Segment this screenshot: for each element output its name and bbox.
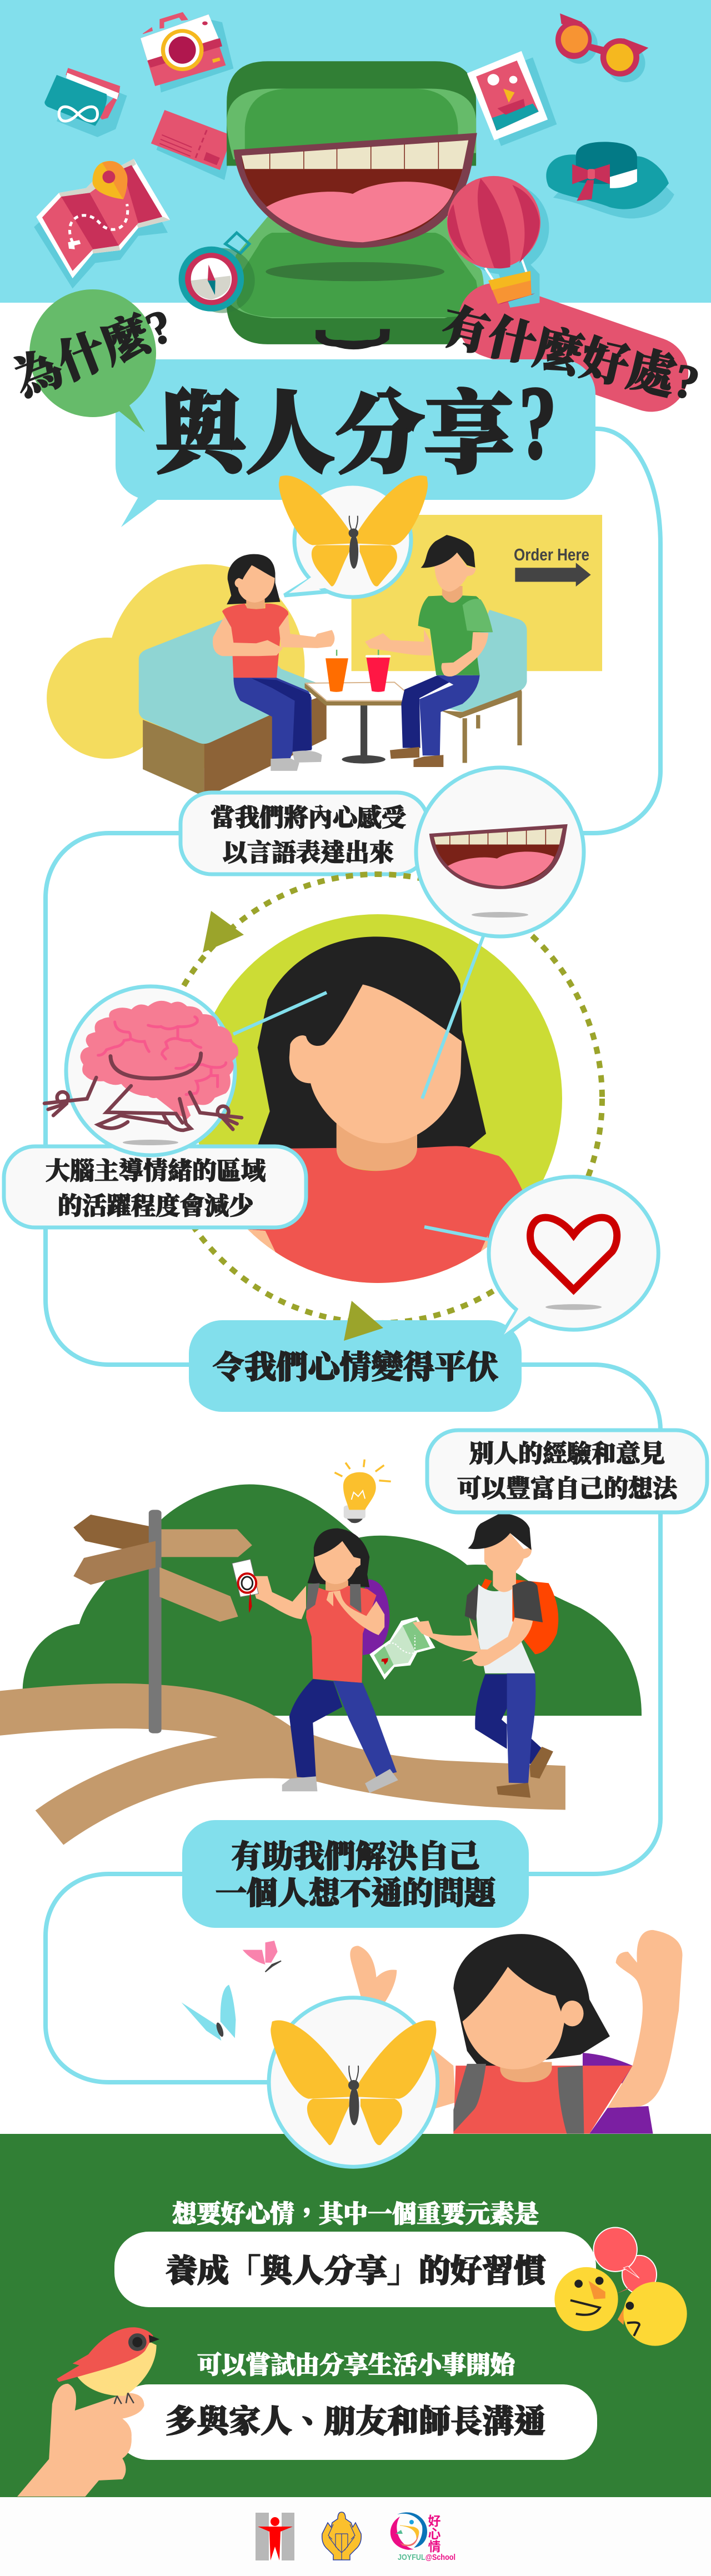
title card — [116, 359, 595, 527]
heart icon bubble — [489, 1177, 658, 1342]
big laughing mouth — [233, 133, 477, 248]
brain icon bubble — [44, 986, 242, 1155]
callout box: solve problems — [182, 1820, 529, 1928]
icon: hot air balloon — [447, 176, 549, 308]
signpost — [73, 1510, 252, 1733]
bench — [139, 617, 327, 796]
icon: hat — [546, 142, 674, 218]
waving woman with backpack — [350, 1930, 683, 2134]
callout box: brain activity: 的活躍程度會減少 — [58, 1192, 256, 1220]
hand-held compass — [232, 1559, 258, 1612]
heading: what benefit: 有什麼好處? — [436, 299, 704, 410]
callout box: calm mood: 令我們心情變得平伏 — [213, 1350, 498, 1385]
pointer lines to icons — [233, 936, 489, 1240]
callout box: express feelings — [181, 793, 428, 874]
mouth icon bubble — [416, 768, 584, 936]
logo: joyful at school: 好 — [428, 2514, 441, 2528]
white pill: good habit: 養成「與人分享」的好習慣 — [166, 2254, 551, 2289]
lead-in text 1: 想要好心情，其中一個重要元素是 — [172, 2200, 539, 2228]
woman portrait in lime circle — [182, 911, 567, 1289]
logo: joyful at school — [390, 2512, 455, 2562]
callout box: brain activity: 大腦主導情緒的區域 — [46, 1156, 266, 1185]
main title: ? — [519, 365, 557, 480]
logo: red figure — [256, 2513, 294, 2560]
logo: joyful at school: 心 — [428, 2527, 441, 2541]
top sky background — [0, 0, 711, 303]
seated woman — [213, 554, 334, 771]
arrowheads on dashed circle — [203, 911, 383, 1341]
winding road — [0, 1683, 565, 1845]
hiker man — [413, 1513, 558, 1798]
callout box: express feelings: 以言語表達出來 — [223, 839, 394, 866]
logo: joyful at school: 情 — [428, 2539, 441, 2554]
footer background — [0, 2497, 711, 2576]
main connector line — [46, 429, 660, 2082]
callout box: others' experience — [427, 1430, 707, 1512]
scene: two friends chatting at cafe — [47, 515, 602, 796]
callout box: express feelings: 當我們將內心感受 — [211, 804, 406, 831]
bottom green panel — [0, 2134, 711, 2497]
emoji faces — [554, 2267, 687, 2346]
callout box: brain activity — [4, 1146, 306, 1227]
sign label: order here: Order Here — [514, 545, 589, 564]
order here arrow — [515, 563, 591, 587]
folded green map — [369, 1617, 435, 1680]
butterfly thought bubble — [284, 484, 411, 597]
callout box: others' experience: 可以豐富自己的想法 — [457, 1475, 680, 1502]
icon: compass — [179, 233, 255, 313]
hand with bird — [17, 2327, 159, 2497]
callout box: calm mood — [189, 1320, 522, 1412]
dashed circular arrow path — [153, 874, 602, 1323]
callout box: solve problems: 有助我們解決自己 — [231, 1840, 480, 1875]
small butterflies — [182, 1941, 281, 2041]
icon: folded map with pin — [34, 159, 170, 288]
icon: yellow butterfly (top) — [279, 475, 428, 587]
white pill: communicate: 多與家人、朋友和師長溝通 — [166, 2404, 545, 2439]
yellow butterfly bubble — [269, 1998, 438, 2167]
brain body — [81, 1001, 238, 1119]
hiker woman — [249, 1528, 398, 1793]
icon: ticket — [151, 110, 233, 180]
brain limbs — [44, 1077, 242, 1130]
green speech bubble: why — [29, 289, 156, 432]
speech balloons — [594, 2227, 657, 2294]
seated man — [365, 535, 493, 767]
heading: why: 為什麼? — [7, 299, 180, 407]
logo: joyful at school: JOYFUL@School — [398, 2553, 455, 2562]
yellow backdrop — [47, 515, 602, 768]
table with drinks — [305, 650, 416, 764]
icon: wallet — [44, 68, 127, 137]
hills — [23, 1484, 642, 1716]
scene: hikers reading map at signpost — [0, 1484, 642, 1845]
callout box: solve problems: 一個人想不通的問題 — [216, 1877, 500, 1911]
icon: chatting emoji — [554, 2227, 687, 2346]
main title: 與人分享 — [156, 385, 514, 484]
right chair — [440, 610, 527, 763]
icon: camera — [141, 12, 233, 92]
pink speech bubble: benefits — [448, 273, 698, 422]
white pill: communicate — [114, 2384, 597, 2460]
light bulb base — [344, 1498, 372, 1523]
callout box: others' experience: 別人的經驗和意見 — [469, 1440, 665, 1467]
icon: sunglasses — [555, 13, 648, 82]
white pill: good habit — [114, 2232, 596, 2307]
suitcase — [227, 61, 484, 349]
bird — [57, 2327, 159, 2404]
logo: gold hands — [322, 2512, 361, 2560]
icon: photo frame — [467, 51, 557, 146]
icon: light bulb — [334, 1460, 391, 1510]
lead-in text 2: 可以嘗試由分享生活小事開始 — [197, 2352, 518, 2379]
